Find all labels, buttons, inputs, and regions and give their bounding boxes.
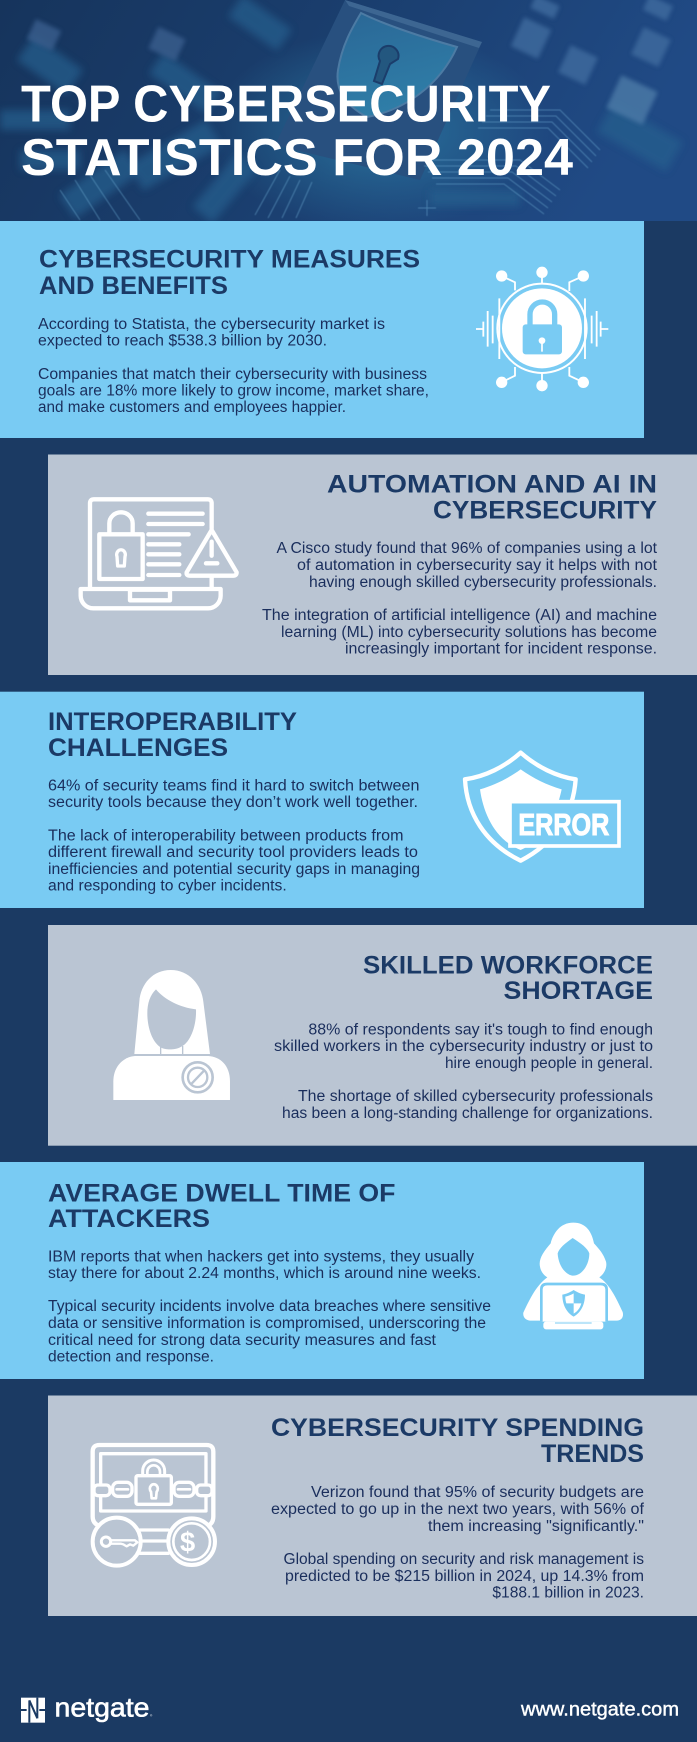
chip with shield — [275, 0, 482, 180]
heading: spending trends: CYBERSECURITY SPENDING — [271, 1415, 644, 1442]
text: dwell time body — [48, 1249, 491, 1366]
icon: chained safe with key and coin — [93, 1445, 215, 1566]
heading: dwell time — [48, 1181, 396, 1233]
icon: netgate mark — [21, 1698, 45, 1723]
heading: dwell time: ATTACKERS — [48, 1206, 210, 1233]
panel: spending trends — [48, 1396, 697, 1616]
text: interoperability body — [48, 778, 420, 895]
title: STATISTICS FOR 2024 — [21, 129, 573, 187]
text: automation and AI body: of automation in cybersecurity say it helps with not — [297, 557, 658, 574]
heading: workforce shortage — [363, 953, 653, 1005]
icon: laptop with lock and warning — [81, 499, 237, 608]
circuit traces — [60, 110, 600, 220]
text: automation and AI body: increasingly important for incident response. — [345, 641, 657, 658]
heading: interoperability — [48, 709, 297, 762]
heading: measures and benefits: CYBERSECURITY MEASURES — [39, 247, 420, 274]
heading: automation and AI — [327, 472, 657, 525]
text: workforce shortage body: 88% of respondents say it's tough to find enough — [308, 1022, 653, 1039]
heading: measures and benefits — [39, 247, 420, 300]
text: interoperability body: and responding to cyber incidents. — [48, 878, 287, 895]
text: measures and benefits body: Companies that match their cybersecurity with business — [38, 366, 427, 383]
text: automation and AI body: A Cisco study found that 96% of companies using a lot — [276, 540, 658, 557]
panel: cybersecurity measures and benefits — [0, 221, 644, 438]
text: spending trends body — [271, 1484, 645, 1602]
text: dwell time body: IBM reports that when hackers get into systems, they usually — [48, 1249, 474, 1266]
icon: circuit padlock — [476, 267, 608, 391]
text: automation and AI body: The integration of artificial intelligence (AI) and machine — [262, 607, 657, 624]
text: interoperability body: The lack of interoperability between products from — [48, 828, 404, 845]
text: dwell time body: data or sensitive information is compromised, underscoring the — [48, 1315, 486, 1332]
icon: shield with error label: ERROR — [518, 808, 609, 842]
text: dwell time body: stay there for about 2.24 months, which is around nine weeks. — [48, 1265, 481, 1282]
text: dwell time body: Typical security incidents involve data breaches where sensitive — [48, 1298, 491, 1315]
heading: measures and benefits: AND BENEFITS — [39, 273, 228, 300]
icon: chained safe with key and coin: $ — [180, 1526, 195, 1557]
text: workforce shortage body: has been a long-standing challenge for organizations. — [282, 1105, 653, 1122]
title — [21, 76, 573, 187]
title: TOP CYBERSECURITY — [21, 76, 551, 134]
text: measures and benefits body: According to Statista, the cybersecurity market is — [38, 316, 385, 333]
panel: skilled workforce shortage — [48, 925, 697, 1146]
heading: automation and AI: CYBERSECURITY — [433, 498, 657, 525]
text: interoperability body: security tools because they don’t work well together. — [48, 794, 418, 811]
text: workforce shortage body: skilled workers in the cybersecurity industry or just to — [274, 1038, 653, 1055]
text: measures and benefits body: goals are 18% more likely to grow income, market share, — [38, 382, 429, 400]
text: workforce shortage body: hire enough people in general. — [445, 1055, 653, 1072]
panel: average dwell time — [0, 1162, 644, 1379]
heading: dwell time: AVERAGE DWELL TIME OF — [48, 1181, 396, 1208]
text: spending trends body: Verizon found that 95% of security budgets are — [311, 1484, 644, 1501]
footer: netgate logo: netgate — [54, 1692, 150, 1722]
text: spending trends body: $188.1 billion in 2023. — [492, 1585, 644, 1602]
text: spending trends body: predicted to be $215 billion in 2024, up 14.3% from — [285, 1568, 644, 1585]
heading: spending trends — [271, 1415, 644, 1468]
text: workforce shortage body — [274, 1022, 653, 1122]
footer: website address: www.netgate.com — [520, 1700, 679, 1721]
panel: interoperability challenges — [0, 692, 644, 908]
text: automation and AI body: learning (ML) into cybersecurity solutions has become — [281, 624, 657, 641]
panel: automation and AI — [48, 454, 697, 675]
heading: workforce shortage: SHORTAGE — [504, 978, 653, 1005]
text: spending trends body: them increasing "significantly." — [428, 1518, 644, 1535]
text: workforce shortage body: The shortage of skilled cybersecurity professionals — [298, 1088, 653, 1105]
footer: netgate logo: ® — [150, 1714, 153, 1718]
text: spending trends body: expected to go up in the next two years, with 56% of — [271, 1501, 645, 1518]
text: interoperability body: different firewall and security tool providers leads to — [48, 844, 418, 861]
text: measures and benefits body — [38, 316, 429, 416]
icon: woman silhouette with badge — [113, 970, 230, 1100]
text: measures and benefits body: expected to reach $538.3 billion by 2030. — [38, 333, 327, 350]
text: automation and AI body — [262, 540, 658, 658]
text: spending trends body: Global spending on security and risk management is — [284, 1551, 644, 1568]
heading: automation and AI: AUTOMATION AND AI IN — [327, 472, 657, 499]
text: interoperability body: 64% of security teams find it hard to switch between — [48, 778, 420, 795]
text: measures and benefits body: and make customers and employees happier. — [38, 399, 346, 416]
text: dwell time body: critical need for strong data security measures and fast — [48, 1332, 437, 1349]
heading: workforce shortage: SKILLED WORKFORCE — [363, 953, 653, 980]
text: dwell time body: detection and response. — [48, 1349, 214, 1366]
text: automation and AI body: having enough skilled cybersecurity professionals. — [309, 574, 657, 591]
heading: spending trends: TRENDS — [541, 1441, 644, 1468]
hero background: circuit board with shield — [0, 0, 697, 230]
icon: hooded hacker at laptop — [523, 1223, 623, 1329]
heading: interoperability: CHALLENGES — [48, 735, 228, 762]
heading: interoperability: INTEROPERABILITY — [48, 709, 297, 736]
footer: netgate logo — [21, 1692, 153, 1723]
text: interoperability body: inefficiencies and potential security gaps in managing — [48, 861, 420, 878]
icon: shield with error label — [465, 753, 619, 861]
